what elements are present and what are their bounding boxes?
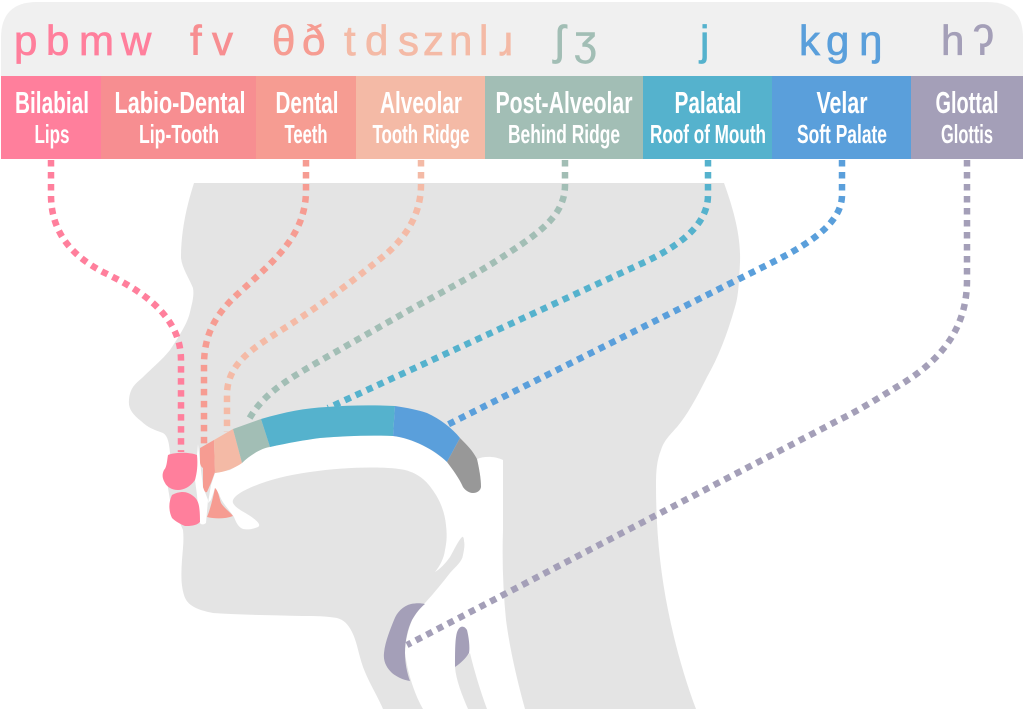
label: labio-dental bbox=[101, 76, 256, 159]
connector: glottal bbox=[407, 160, 967, 645]
label: velar: Velar bbox=[816, 85, 868, 120]
head profile silhouette bbox=[129, 183, 740, 709]
header background panel bbox=[1, 2, 1023, 76]
label: velar: Soft Palate bbox=[797, 119, 887, 149]
label: bilabial: Lips bbox=[34, 119, 70, 149]
label: post-alveolar: Post-Alveolar bbox=[496, 85, 632, 120]
phonemes: labio-dental: fv bbox=[190, 17, 233, 64]
phoneme symbols row bbox=[14, 17, 994, 64]
label: alveolar: Alveolar bbox=[380, 85, 462, 120]
lower teeth bbox=[207, 488, 233, 518]
label: post-alveolar bbox=[485, 76, 643, 159]
label: glottal bbox=[911, 76, 1023, 159]
phonemes: alveolar: tdsznlɹ bbox=[344, 17, 513, 64]
label: palatal bbox=[643, 76, 772, 159]
connector: post-alveolar bbox=[248, 160, 565, 421]
lower lip bbox=[169, 492, 200, 526]
soft palate bbox=[393, 406, 460, 462]
mouth and airway cavity bbox=[195, 436, 525, 709]
glottis back bbox=[455, 627, 469, 667]
post-alveolar region bbox=[233, 419, 270, 463]
glottis front bbox=[384, 603, 425, 681]
connector: alveolar bbox=[227, 160, 421, 432]
phonemes: palatal: j bbox=[698, 17, 709, 64]
phonemes: bilabial: pbmw bbox=[14, 17, 152, 64]
label: dental: Teeth bbox=[284, 119, 328, 149]
connector: dental bbox=[204, 160, 306, 445]
place of articulation labels bbox=[1, 76, 1023, 159]
upper lip bbox=[163, 453, 197, 490]
phonemes: glottal: hʔ bbox=[941, 17, 994, 64]
connector: velar bbox=[445, 160, 842, 426]
label: dental bbox=[256, 76, 356, 159]
label: bilabial bbox=[1, 76, 101, 159]
phonemes: post-alveolar: ʃʒ bbox=[552, 17, 597, 64]
uvula end bbox=[447, 438, 481, 493]
label: glottal: Glottis bbox=[941, 119, 993, 149]
upper teeth bbox=[200, 440, 215, 492]
label: labio-dental: Lip-Tooth bbox=[139, 119, 219, 149]
label: post-alveolar: Behind Ridge bbox=[508, 119, 620, 149]
connector: bilabial bbox=[51, 160, 181, 452]
alveolar ridge bbox=[214, 429, 242, 473]
connector: palatal bbox=[328, 160, 708, 408]
hard palate bbox=[261, 405, 395, 447]
label: dental: Dental bbox=[276, 85, 338, 120]
label: velar bbox=[772, 76, 911, 159]
label: bilabial: Bilabial bbox=[15, 85, 89, 120]
label: labio-dental: Labio-Dental bbox=[114, 85, 246, 120]
label: alveolar: Tooth Ridge bbox=[372, 119, 470, 149]
label: palatal: Palatal bbox=[674, 85, 742, 120]
phonemes: velar: kgŋ bbox=[799, 17, 882, 64]
phonemes: dental: θð bbox=[272, 17, 325, 64]
label: palatal: Roof of Mouth bbox=[650, 119, 766, 149]
label: alveolar bbox=[356, 76, 485, 159]
